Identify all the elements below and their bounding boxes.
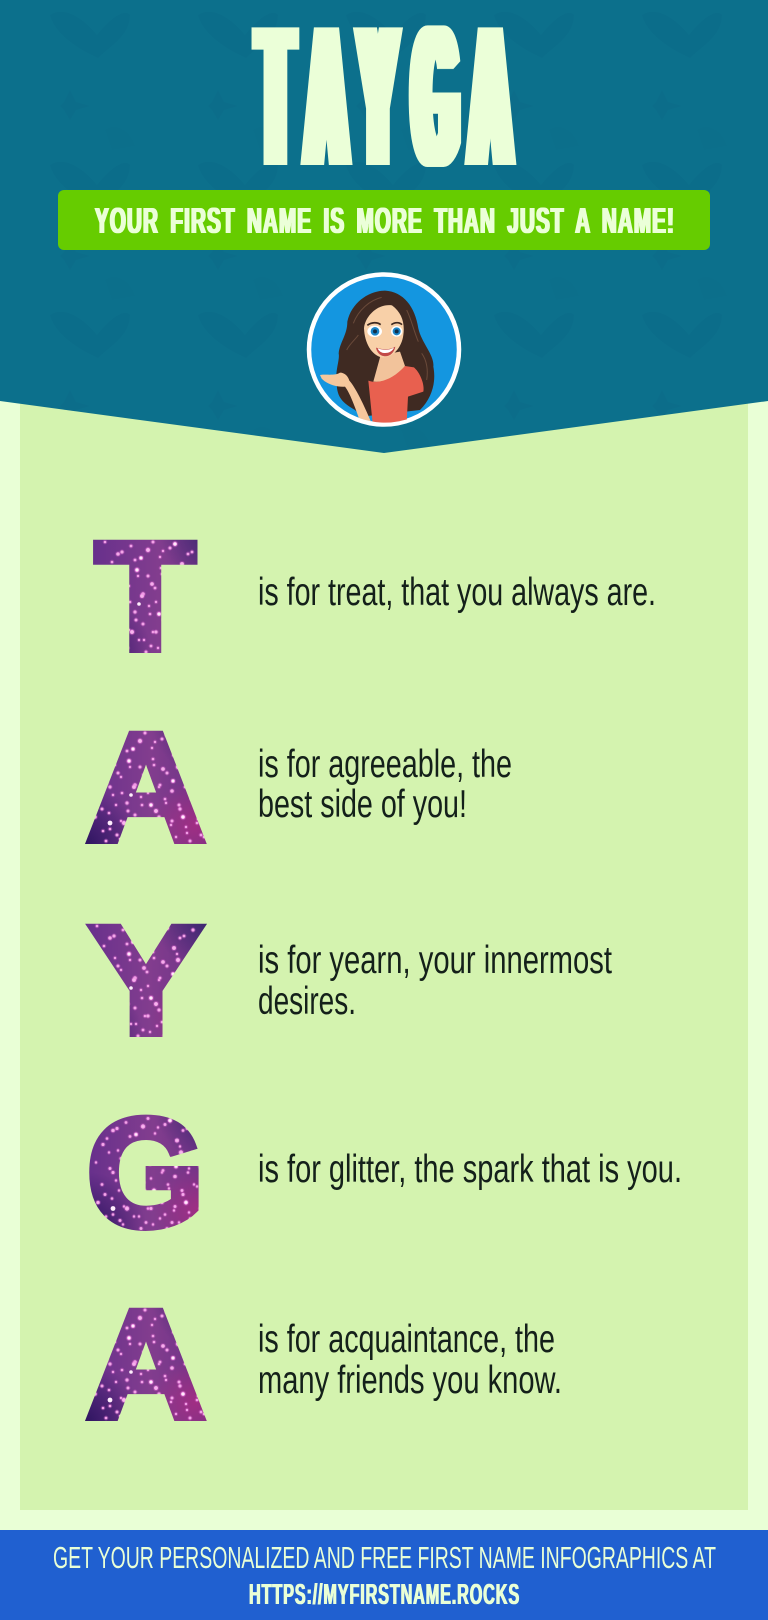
text: Y line [258,939,612,1023]
panel: header chevron [0,0,768,453]
footer [0,1530,768,1620]
hair [336,291,434,417]
letter Y: Y [90,895,202,1066]
neck [373,352,405,382]
letter A second: A [87,1279,205,1450]
text: A line: is for agreeable, the [258,743,512,786]
hair highlights [347,297,427,380]
text: Y line: desires. [258,980,356,1023]
text: Y line: is for yearn, your innermost [258,939,612,982]
text: second A line: many friends you know. [258,1359,562,1402]
face [364,305,404,357]
eyes [367,326,382,337]
mouth [376,347,395,356]
footer url: HTTPS://MYFIRSTNAME.ROCKS [249,1579,520,1611]
banner [58,190,710,250]
text: second A line [258,1318,562,1402]
letter T: T [96,511,195,682]
panel: main letters panel [20,380,748,1510]
letter G: G [87,1088,204,1258]
text: A line: best side of you! [258,783,467,826]
letter A: A [87,702,205,873]
top [368,366,424,423]
arm [320,373,372,423]
icon: avatar portrait [309,274,459,424]
text: A line [258,743,512,826]
text: second A line: is for acquaintance, the [258,1318,555,1361]
